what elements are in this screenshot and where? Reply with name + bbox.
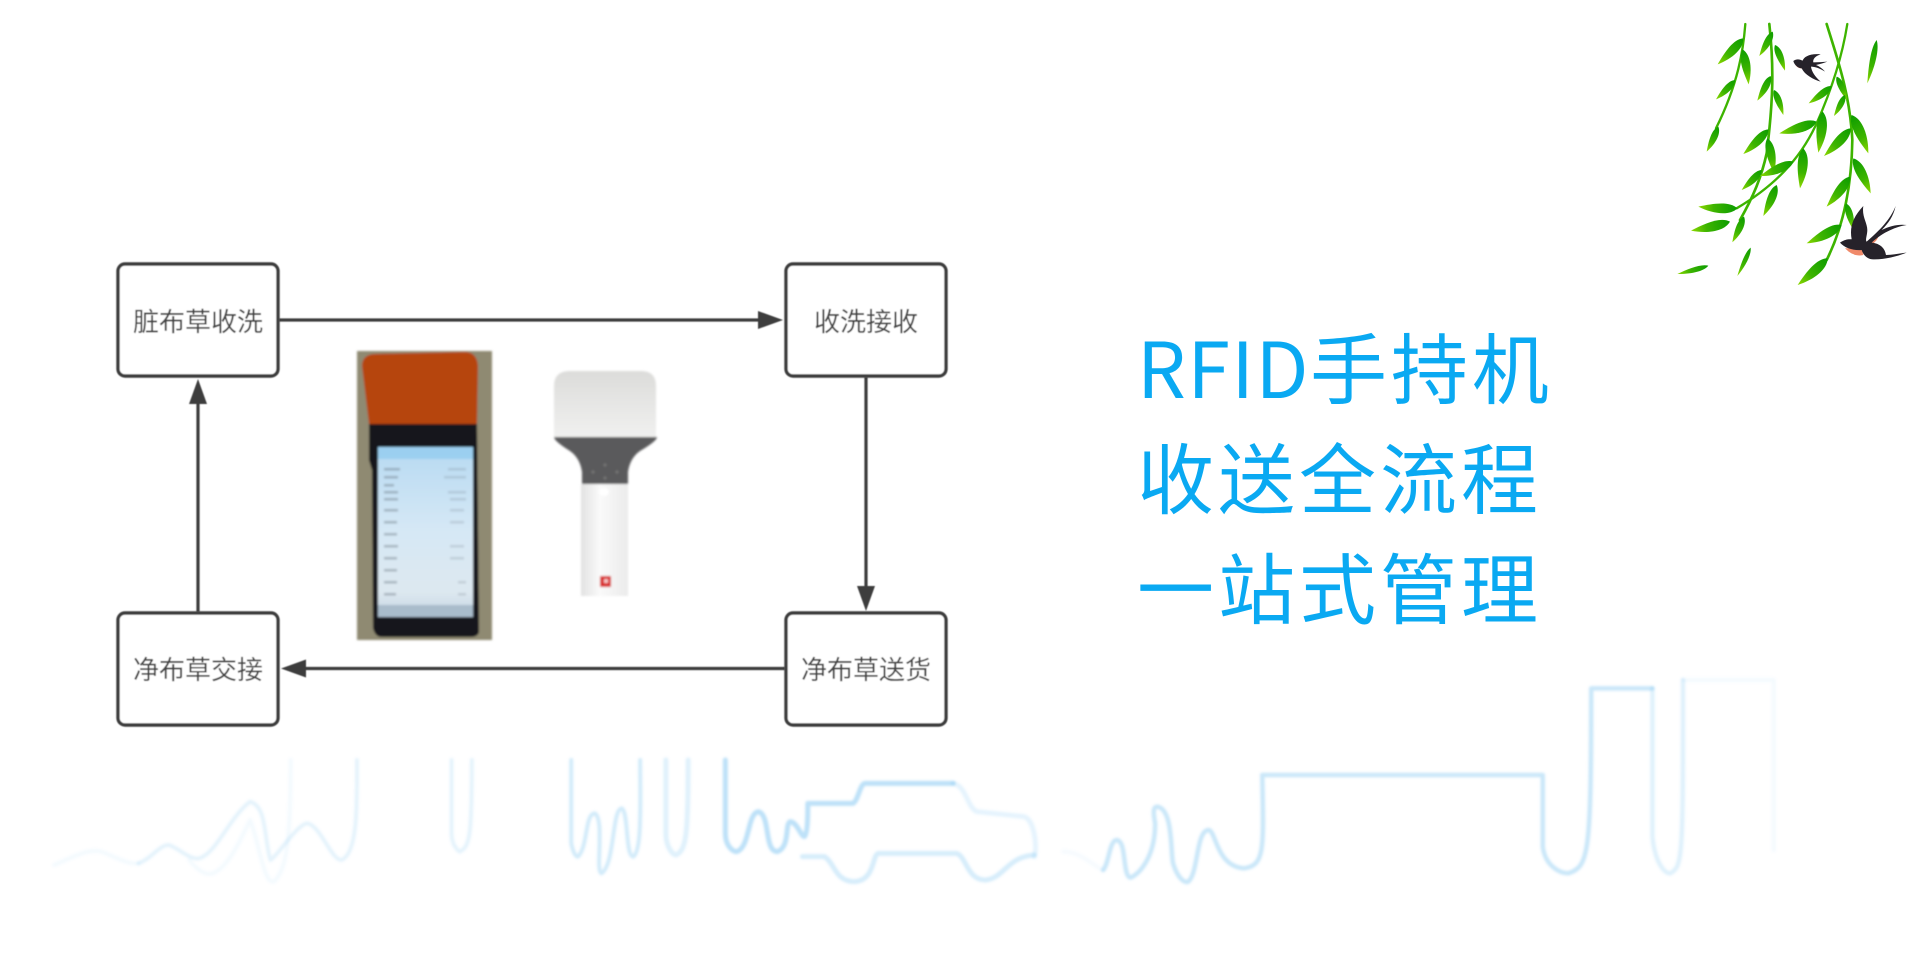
node: 脏布草收洗: 脏布草收洗 [133,307,263,337]
node: 净布草送货: 净布草送货 [801,655,931,685]
arrow: dirty linen collection to receiving [279,311,783,329]
title [1137,310,1553,641]
decoration: faded blue line drawing right [1063,680,1774,882]
title line 2: 收送全流程 [1137,420,1542,531]
arrow: receiving to clean linen delivery [857,377,875,611]
icon: small swallow [1793,54,1827,82]
icon: large swallow [1840,206,1907,259]
flow diagram [118,264,946,725]
arrow: handover to dirty linen collection [189,379,207,612]
device photo: handheld terminal with orange printer cover [357,351,492,640]
willow leaves [1676,30,1880,289]
node: 收洗接收 [786,264,946,376]
node: 净布草交接 [118,613,278,725]
decoration: willow branches and swallows [1676,24,1907,289]
node: 脏布草收洗 [118,264,278,376]
node: 净布草送货 [786,613,946,725]
node: 净布草交接: 净布草交接 [133,655,263,685]
arrow: clean linen delivery to handover [281,660,785,678]
node: 收洗接收: 收洗接收 [814,307,918,337]
willow stems [1716,24,1852,260]
title line 1: RFID手持机 [1137,310,1553,421]
device photo: white RFID reader [554,371,657,596]
title line 3: 一站式管理 [1137,530,1542,641]
decoration: faded blue line drawing left with truck [54,760,1036,882]
